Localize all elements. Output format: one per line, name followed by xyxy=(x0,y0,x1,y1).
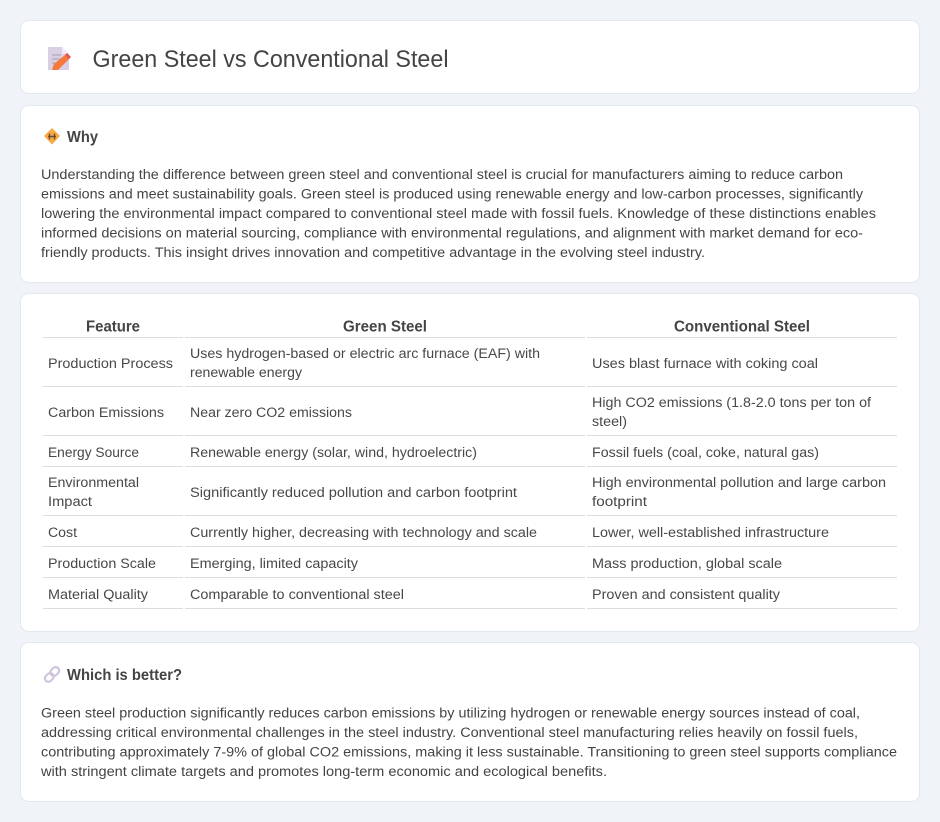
row: production scale: Mass production, global scale xyxy=(592,556,782,572)
panel: title xyxy=(20,20,920,94)
why paragraph: informed decisions on material sourcing, compliance with environmental regulations, and alignment with market demand for eco- xyxy=(41,226,863,242)
row: environmental impact: Impact xyxy=(48,494,92,510)
table header: Green Steel xyxy=(343,318,427,336)
row: energy source: Energy Source xyxy=(48,445,139,461)
row: environmental impact xyxy=(48,475,886,510)
row: energy source: Renewable energy (solar, wind, hydroelectric) xyxy=(190,445,477,461)
row: energy source xyxy=(48,445,819,461)
row: production scale xyxy=(48,556,782,572)
why paragraph: emissions and meet sustainability goals. Green steel is produced using renewable energy and low-carbon processes, significantly xyxy=(41,186,864,202)
row: cost xyxy=(48,525,829,541)
row: carbon emissions: steel) xyxy=(592,414,627,430)
row: material quality: Comparable to conventional steel xyxy=(190,587,404,603)
row: environmental impact: High environmental pollution and large carbon xyxy=(592,475,886,491)
row: production process: Uses hydrogen-based or electric arc furnace (EAF) with xyxy=(190,346,540,362)
row: material quality: Material Quality xyxy=(48,587,149,603)
why paragraph: lowering the environmental impact compared to conventional steel made with fossil fuels. Knowledge of these distinctions enables xyxy=(41,206,876,222)
row: production process xyxy=(48,346,818,381)
which is better paragraph xyxy=(40,706,897,780)
icon: warning diamond xyxy=(44,128,60,144)
row: environmental impact: footprint xyxy=(592,494,647,510)
row: carbon emissions xyxy=(48,395,871,430)
panel: why xyxy=(20,106,920,282)
icon: memo with pencil xyxy=(48,47,71,70)
row: cost: Cost xyxy=(48,525,77,541)
row: environmental impact: Environmental xyxy=(48,475,139,491)
which is better paragraph: contributing approximately 7-9% of global CO2 emissions, making it less sustainable. Transitioning to green steel supports compliance xyxy=(41,744,897,760)
row: material quality xyxy=(48,587,781,603)
row: cost: Lower, well-established infrastructure xyxy=(592,525,829,541)
which is better paragraph: with stringent climate targets and promotes long-term economic and ecological benefits. xyxy=(40,764,607,780)
row: production process: renewable energy xyxy=(190,365,303,381)
table header: Conventional Steel xyxy=(674,318,810,336)
title text: Green Steel vs Conventional Steel xyxy=(92,46,448,73)
row: production scale: Production Scale xyxy=(48,556,156,572)
panel: which is better xyxy=(20,642,920,802)
icon: link xyxy=(43,666,61,683)
row: energy source: Fossil fuels (coal, coke, natural gas) xyxy=(592,445,819,461)
row: carbon emissions: Near zero CO2 emissions xyxy=(190,405,352,421)
table header: Feature xyxy=(86,318,140,336)
row: environmental impact: Significantly reduced pollution and carbon footprint xyxy=(190,485,517,501)
heading: why: Why xyxy=(67,129,98,146)
row: production process: Production Process xyxy=(48,356,173,372)
why paragraph: Understanding the difference between green steel and conventional steel is crucial for manufacturers aiming to reduce carbon xyxy=(41,167,843,183)
which is better paragraph: Green steel production significantly reduces carbon emissions by utilizing hydrogen or renewable energy sources instead of coal, xyxy=(41,706,860,722)
row: carbon emissions: High CO2 emissions (1.8-2.0 tons per ton of xyxy=(592,395,871,411)
heading: which is better: Which is better? xyxy=(67,667,182,684)
why paragraph xyxy=(41,167,876,261)
table header xyxy=(86,318,810,336)
row: carbon emissions: Carbon Emissions xyxy=(48,405,164,421)
row: material quality: Proven and consistent quality xyxy=(592,587,781,603)
why paragraph: friendly products. This insight drives innovation and competitive advantage in the evolving steel industry. xyxy=(41,245,705,261)
row: production process: Uses blast furnace with coking coal xyxy=(592,356,818,372)
panel: comparison table xyxy=(20,294,920,632)
which is better paragraph: addressing critical environmental challenges in the steel industry. Conventional steel manufacturing relies heavily on fossil fuels, xyxy=(41,725,858,741)
row: cost: Currently higher, decreasing with technology and scale xyxy=(190,525,537,541)
row: production scale: Emerging, limited capacity xyxy=(190,556,359,572)
